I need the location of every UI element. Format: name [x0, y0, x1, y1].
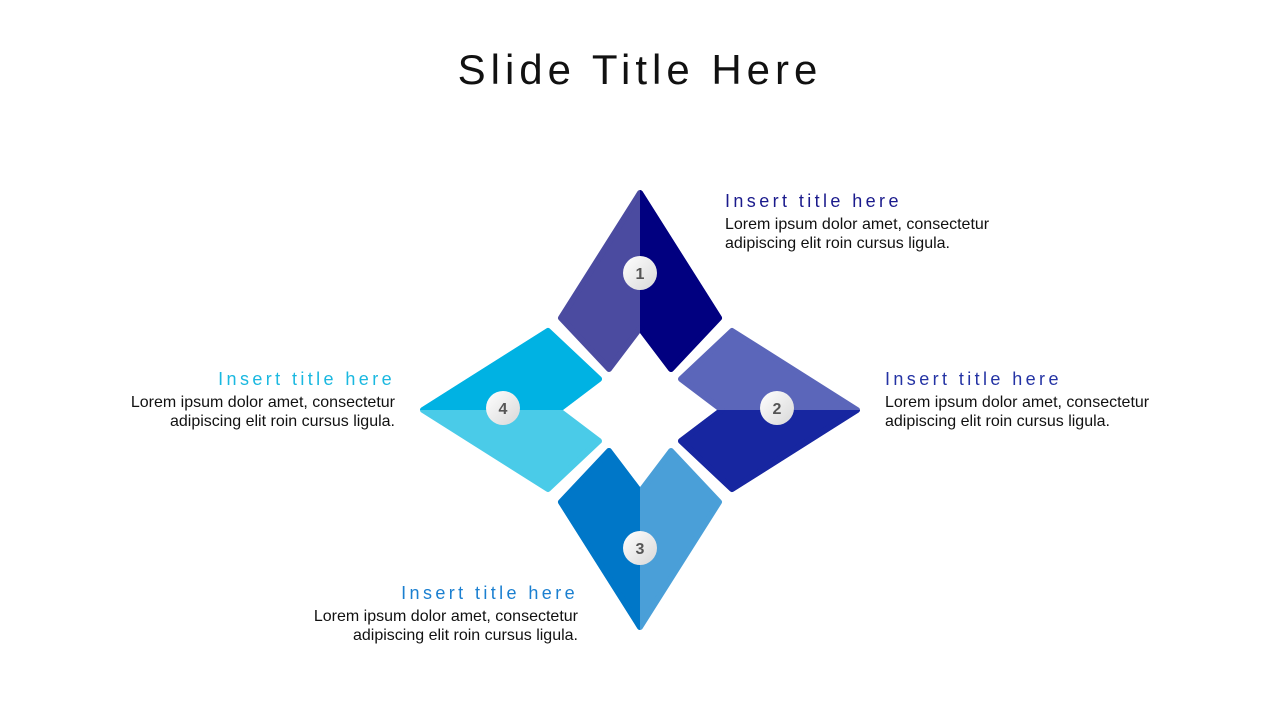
body 3: adipiscing elit roin cursus ligula.	[353, 627, 578, 644]
body 1: adipiscing elit roin cursus ligula.	[725, 235, 950, 252]
badge 2	[760, 391, 794, 425]
body 1	[725, 216, 989, 252]
badge 4: 4	[499, 401, 508, 418]
body 4: adipiscing elit roin cursus ligula.	[170, 413, 395, 430]
piece 2	[681, 331, 857, 489]
text block 4	[131, 369, 395, 430]
heading 4: Insert title here	[218, 369, 395, 389]
title: Slide Title Here	[458, 46, 822, 93]
text block 3	[314, 583, 578, 644]
badge 3: 3	[636, 541, 645, 558]
text block 2	[885, 369, 1149, 430]
badge 2: 2	[773, 401, 782, 418]
heading 1: Insert title here	[725, 191, 902, 211]
body 2	[885, 394, 1149, 430]
body 3	[314, 608, 578, 644]
piece 1	[561, 193, 719, 369]
heading 3: Insert title here	[401, 583, 578, 603]
heading 2: Insert title here	[885, 369, 1062, 389]
body 4: Lorem ipsum dolor amet, consectetur	[131, 394, 395, 411]
badge 3	[623, 531, 657, 565]
piece 4	[423, 331, 599, 489]
text block 1	[725, 191, 989, 252]
body 2: Lorem ipsum dolor amet, consectetur	[885, 394, 1149, 411]
star diagram	[420, 190, 860, 630]
badge 1	[623, 256, 657, 290]
badge 1: 1	[636, 266, 645, 283]
body 4	[131, 394, 395, 430]
body 1: Lorem ipsum dolor amet, consectetur	[725, 216, 989, 233]
body 2: adipiscing elit roin cursus ligula.	[885, 413, 1110, 430]
piece 3	[561, 451, 719, 627]
body 3: Lorem ipsum dolor amet, consectetur	[314, 608, 578, 625]
badge 4	[486, 391, 520, 425]
